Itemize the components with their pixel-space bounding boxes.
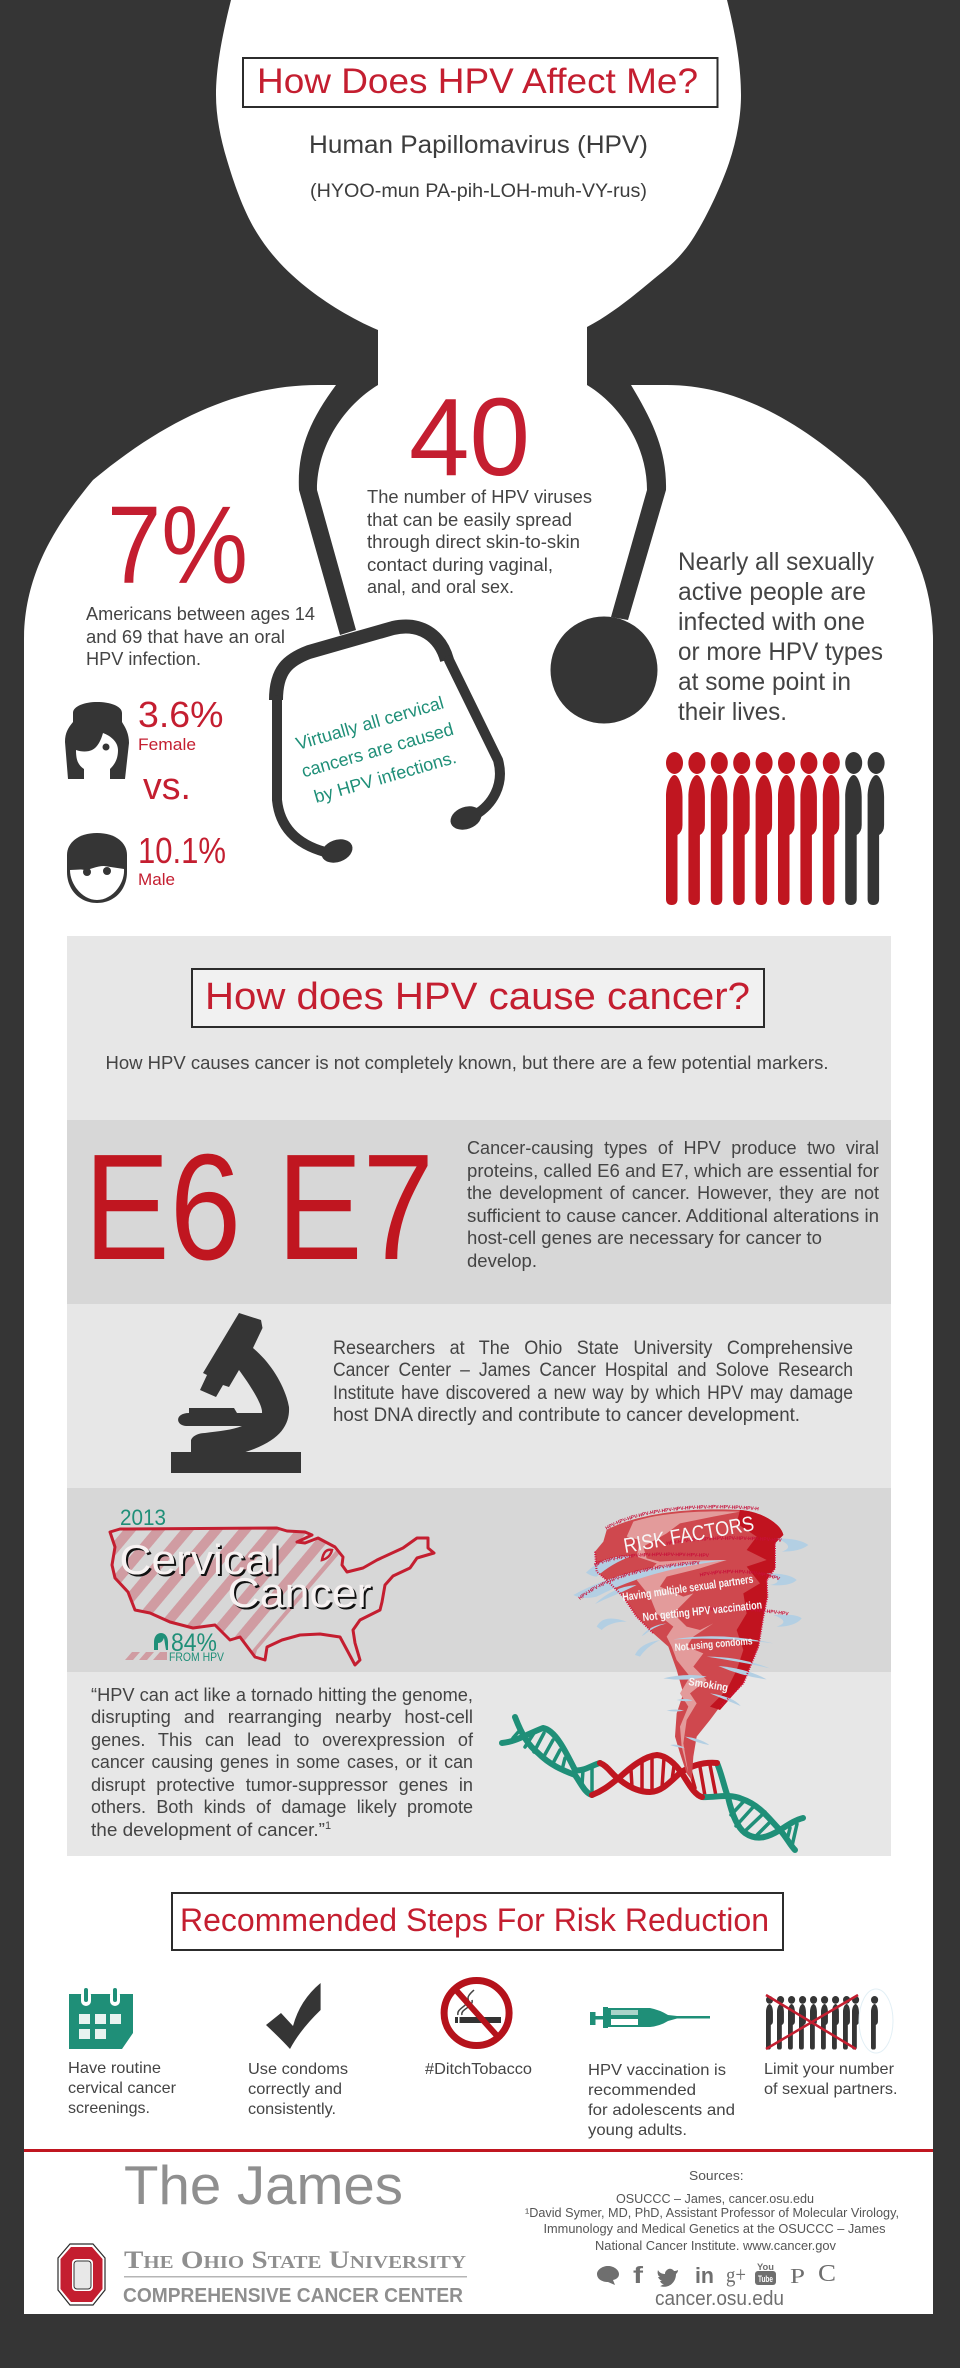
map text: Cancer <box>228 1569 372 1616</box>
icon: twitter <box>658 2269 678 2287</box>
sources: National Cancer Institute. www.cancer.gov <box>595 2238 836 2253</box>
footer brand: The James: The James <box>124 2154 403 2216</box>
legend: 84 percent: FROM HPV <box>169 1650 224 1664</box>
sources <box>525 2168 899 2253</box>
subtitle: Human Papillomavirus (HPV) <box>309 131 648 159</box>
footer url: cancer.osu.edu <box>655 2288 784 2310</box>
risk factor labels <box>622 1512 763 1694</box>
step: limit partners: of sexual partners. <box>764 2081 898 2098</box>
paragraph <box>333 1338 853 1426</box>
paragraph: develop. <box>467 1250 537 1271</box>
step: condoms: consistently. <box>248 2101 336 2118</box>
paragraph: sufficient to cause cancer. Additional alterations in <box>467 1205 879 1226</box>
text: nearly all: or more HPV types <box>678 638 883 666</box>
icon: youtube: You <box>757 2262 774 2272</box>
icon: youtube: Tube <box>758 2274 773 2284</box>
icon: man <box>67 833 127 903</box>
step: screenings: screenings. <box>68 2100 150 2117</box>
step: screenings <box>68 1988 177 2117</box>
map text: Cervical <box>122 1538 282 1585</box>
map text: Cervical <box>120 1536 280 1583</box>
quote text: cancer causing genes in some cases, or it can <box>91 1751 473 1772</box>
icon: pinterest: P <box>790 2264 805 2288</box>
footer divider <box>24 2149 933 2152</box>
intro text: How HPV causes cancer is not completely known, but there are a few potential markers. <box>106 1052 829 1073</box>
HPV microtext: HPV-HPV-HPV-HPV-HPV-HPV-HPV <box>700 1570 780 1580</box>
heading: How does HPV cause cancer? <box>205 976 750 1018</box>
stat: female <box>138 694 224 754</box>
year: 2013 <box>120 1505 166 1530</box>
heading: recommended steps <box>172 1893 783 1950</box>
sources: Immunology and Medical Genetics at the OSUCCC – James <box>544 2221 886 2236</box>
logo: block O <box>58 2244 105 2305</box>
risk factor labels: Not using condoms <box>674 1635 753 1654</box>
stat: 7 percent: and 69 that have an oral <box>86 627 285 647</box>
funnel base <box>595 1509 783 1780</box>
people chart: 8 of 10 <box>666 752 885 905</box>
panel: quote <box>67 1672 891 1856</box>
paragraph: Researchers at The Ohio State University Comprehensive <box>333 1338 853 1359</box>
social icons <box>597 2261 836 2288</box>
step: vaccination: recommended <box>588 2082 696 2099</box>
title: How Does HPV Affect Me? <box>257 62 698 101</box>
logo: university wordmark <box>123 2247 467 2307</box>
callout: cervical cancers: cancers are caused <box>299 719 456 781</box>
icon: google plus: g+ <box>726 2262 746 2287</box>
step: vaccination <box>588 2007 735 2139</box>
quote text: disrupting and rearranging nearby host-cell <box>91 1706 473 1727</box>
paragraph: host DNA directly and contribute to cancer development. <box>333 1405 800 1426</box>
dashed fuzz <box>595 1543 775 1707</box>
stat: male: Male <box>138 870 175 889</box>
subtitle: (HYOO-mun PA-pih-LOH-muh-VY-rus) <box>310 181 647 202</box>
icon: youtube <box>755 2262 776 2285</box>
funnel light centre <box>627 1511 740 1773</box>
icon: calendar <box>69 1988 133 2049</box>
icon: check mark <box>266 1983 321 2049</box>
quote text: genes. This can lead to overexpression of <box>91 1729 474 1750</box>
HPV microtext: HPV-HPV-HPV-HPV-HPV-HPV-HPV-HPV <box>698 1606 789 1616</box>
icon: cancer center mark: C <box>818 2261 836 2287</box>
step: condoms: Use condoms <box>248 2061 348 2078</box>
strand red <box>592 1755 717 1797</box>
callout: cervical cancers: by HPV infections. <box>312 747 459 807</box>
rungs <box>513 1730 797 1846</box>
risk factor labels: RISK FACTORS <box>622 1512 756 1558</box>
step: screenings: Have routine <box>68 2060 161 2077</box>
HPV microtext: HPV-HPV-HPV-HPV-HPV-HPV-HPV-HPV-HPV-HPV <box>666 1536 782 1545</box>
panel: how does HPV cause cancer <box>67 936 891 1120</box>
stat: 7 percent: HPV infection. <box>86 649 201 669</box>
step: condoms <box>248 1983 348 2118</box>
text: nearly all: Nearly all sexually <box>678 548 874 576</box>
stat: female: Female <box>138 735 196 754</box>
text: nearly all <box>678 548 883 726</box>
stat: female: 3.6% <box>138 694 224 735</box>
callout: cervical cancers <box>291 692 463 808</box>
step: ditch tobacco: #DitchTobacco <box>425 2061 532 2078</box>
step: vaccination: HPV vaccination is <box>588 2062 726 2079</box>
step: vaccination: young adults. <box>588 2122 687 2139</box>
risk factor labels: Smoking <box>688 1676 729 1694</box>
step: limit partners <box>764 1989 898 2098</box>
paragraph <box>467 1137 879 1271</box>
stat: 40 viruses: contact during vaginal, <box>367 555 553 575</box>
callout: cervical cancers: Virtually all cervical <box>294 693 446 754</box>
stat: male <box>138 830 226 889</box>
text: nearly all: their lives. <box>678 698 787 726</box>
text: nearly all: at some point in <box>678 668 851 696</box>
paragraph: Institute have discovered a new way by which HPV may damage <box>333 1383 853 1404</box>
big label: E6 E7 <box>84 1122 434 1291</box>
legend: 84 percent: 84% <box>171 1629 217 1657</box>
quote text: the development of cancer.” <box>91 1819 325 1840</box>
icon: syringe <box>590 2007 710 2028</box>
quote text: others. Both kinds of damage likely promote <box>91 1796 473 1817</box>
stat: 40 viruses: that can be easily spread <box>367 510 572 530</box>
versus label: vs. <box>143 766 191 808</box>
map text: Cancer <box>230 1571 374 1618</box>
quote text: 1 <box>325 1820 331 1832</box>
heading <box>192 969 764 1027</box>
quote text: “HPV can act like a tornado hitting the genome, <box>91 1684 473 1705</box>
stat: 40 viruses <box>367 376 592 597</box>
paragraph: the development of cancer. However, they are not <box>467 1182 879 1203</box>
paragraph: Cancer-causing types of HPV produce two viral <box>467 1137 879 1158</box>
panel: researchers <box>67 1304 891 1488</box>
funnel dark side <box>710 1510 783 1710</box>
legend: 84 percent <box>125 1629 224 1664</box>
panel: cervical cancer map <box>67 1488 891 1672</box>
text: nearly all: active people are <box>678 578 866 606</box>
icon: woman <box>65 702 129 779</box>
strand teal <box>502 1717 803 1850</box>
quote text: disrupt protective tumor-suppressor genes in <box>91 1774 473 1795</box>
step: ditch tobacco <box>425 1980 532 2078</box>
step: vaccination: for adolescents and <box>588 2102 735 2119</box>
stat: 40 viruses: through direct skin-to-skin <box>367 532 580 552</box>
icon: crossed out people <box>766 1989 893 2053</box>
stethoscope <box>276 385 666 867</box>
text: nearly all: infected with one <box>678 608 865 636</box>
stat: 40 viruses: anal, and oral sex. <box>367 577 514 597</box>
heading: recommended steps: Recommended Steps For Risk Reduction <box>180 1902 769 1938</box>
icon: facebook: f <box>633 2262 643 2288</box>
HPV microtext: HPV-HPV-HPV-HPV-HPV-HPV-HPV-HPV-HPV-HPV-HPV <box>578 1560 700 1600</box>
map text <box>120 1536 374 1618</box>
stat: 40 viruses: The number of HPV viruses <box>367 487 592 507</box>
stat: 7 percent: Americans between ages 14 <box>86 604 315 624</box>
wind swooshes <box>573 1538 808 1748</box>
subtitle <box>309 131 648 202</box>
paragraph: proteins, called E6 and E7, which are essential for <box>467 1160 879 1181</box>
stat: 7 percent <box>86 484 315 669</box>
stat: 7 percent: 7% <box>107 484 248 607</box>
HPV microtext: HPV-HPV-HPV-HPV-HPV-HPV-HPV-HPV-HPV-HPV-HPV-HPV-HPV-HPV <box>605 1504 759 1530</box>
DNA strand <box>502 1717 803 1850</box>
icon: microscope <box>171 1313 301 1473</box>
icon: linkedin: in <box>695 2263 714 2288</box>
paragraph: Cancer Center – James Cancer Hospital and Solove Research <box>333 1360 853 1381</box>
icon: chat bubble <box>597 2266 619 2285</box>
sources: OSUCCC – James, cancer.osu.edu <box>616 2191 814 2206</box>
risk factor labels: Having multiple sexual partners <box>622 1574 754 1604</box>
paragraph: host-cell genes are necessary for cancer to <box>467 1227 822 1248</box>
step: condoms: correctly and <box>248 2081 342 2098</box>
icon: no smoking <box>444 1980 509 2046</box>
quote text <box>91 1684 474 1840</box>
sources: Sources: <box>689 2168 744 2183</box>
US map <box>100 1520 434 1670</box>
logo: university wordmark: The Ohio State University <box>124 2247 466 2274</box>
panel: E6 E7 <box>67 1120 891 1304</box>
stat: 40 viruses: 40 <box>409 376 530 499</box>
HPV microtext: HPV-HPV-HPV-HPV-HPV-HPV-HPV-HPV-HPV-HPV <box>594 1552 709 1566</box>
risk factor labels: Not getting HPV vaccination <box>642 1600 763 1624</box>
step: limit partners: Limit your number <box>764 2061 895 2078</box>
stat: male: 10.1% <box>138 830 226 871</box>
logo: university wordmark: COMPREHENSIVE CANCER CENTER <box>123 2285 464 2307</box>
HPV microtext <box>578 1504 789 1616</box>
step: screenings: cervical cancer <box>68 2080 177 2097</box>
sources: ¹David Symer, MD, PhD, Assistant Professor of Molecular Virology, <box>525 2205 899 2220</box>
tornado: risk factors <box>574 1504 808 1780</box>
